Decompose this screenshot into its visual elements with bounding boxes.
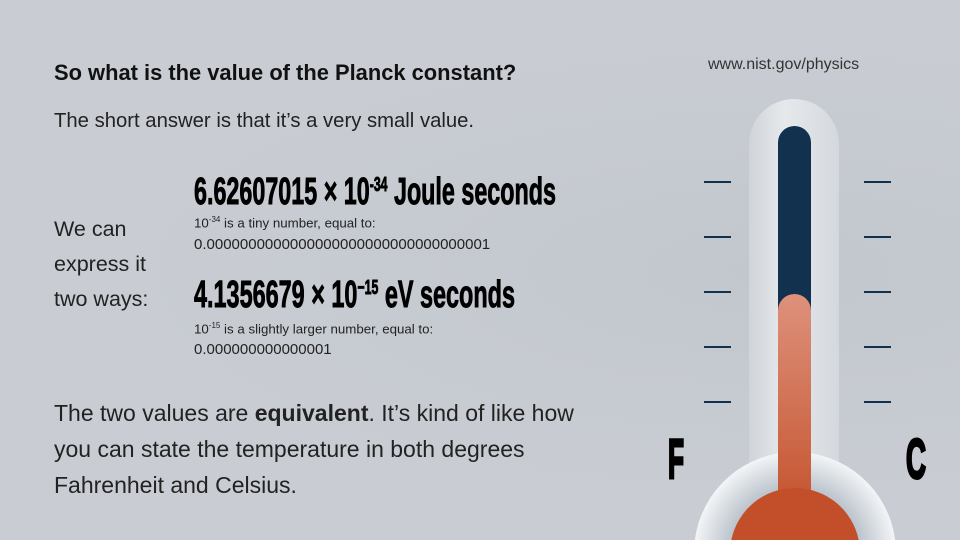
conclusion text: you can state the temperature in both degrees	[54, 436, 525, 462]
conclusion text: Fahrenheit and Celsius.	[54, 472, 297, 498]
formula 2: 4.1356679 × 10	[194, 274, 459, 316]
side text: two ways: two ways:	[54, 287, 148, 311]
title: So what is the value of the Planck constant?	[54, 60, 516, 85]
formula block	[194, 171, 556, 358]
conclusion text	[54, 400, 574, 498]
thermometer: C	[906, 427, 926, 490]
note 1: 0.0000000000000000000000000000000001	[194, 236, 490, 253]
note 1	[194, 215, 490, 253]
note 2	[194, 321, 433, 358]
note 2: 0.000000000000001	[194, 341, 332, 358]
formula 2: −15	[357, 277, 378, 299]
side text: two ways	[54, 217, 148, 311]
tube	[695, 99, 895, 540]
url: www.nist.gov/physics	[708, 56, 859, 73]
ticks	[704, 182, 891, 402]
side text: two ways: We can	[54, 217, 126, 241]
note 1: 10-34 is a tiny number, equal to:	[194, 215, 376, 230]
formula 1: -34	[370, 174, 388, 196]
conclusion text: The two values are equivalent. It’s kind of like how	[54, 400, 574, 426]
thermometer: F	[668, 427, 684, 490]
side text: two ways: express it	[54, 252, 146, 276]
formula 1: 6.62607015 × 10	[194, 171, 480, 213]
intro text: The short answer is that it’s a very small value.	[54, 110, 474, 132]
note 2: 10-15 is a slightly larger number, equal to:	[194, 321, 433, 336]
